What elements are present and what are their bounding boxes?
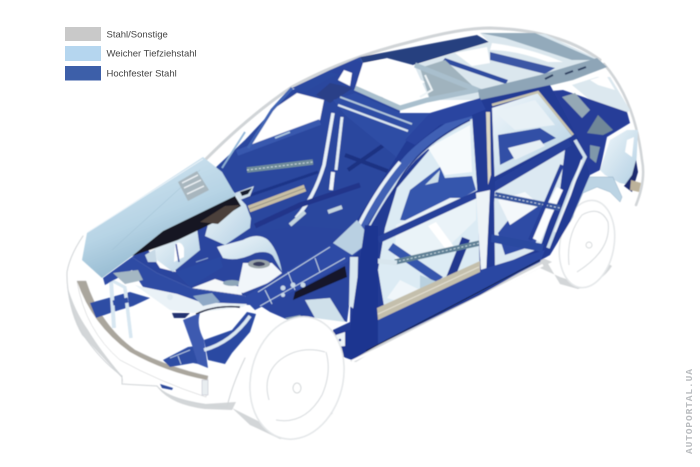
- rear quarter blue frame: [540, 90, 630, 175]
- far A-pillar top: [316, 60, 363, 103]
- windshield opening: [355, 60, 425, 100]
- window frame beige trim: [492, 92, 573, 135]
- rail end at cowl: [235, 186, 254, 200]
- sunroof frame: [355, 65, 477, 108]
- front lower structure: [90, 292, 256, 368]
- near roof rail: [405, 98, 487, 145]
- C-pillar stripes: [548, 140, 585, 248]
- B-pillar: [472, 107, 495, 285]
- car outline: outer roof and rear lines: [67, 28, 643, 407]
- roof panel: [292, 35, 489, 92]
- hood panel: [82, 157, 241, 278]
- near-side blue frame: [333, 85, 590, 360]
- white gap and pale bracket: [145, 228, 242, 295]
- legend label: Stahl/Sonstige: Stahl/Sonstige: [106, 30, 168, 40]
- car body-in-white illustration: [67, 28, 643, 449]
- legend swatch: Hochfester Stahl: [65, 66, 101, 80]
- near pillar foot: [333, 225, 378, 360]
- hood vent: [178, 171, 209, 201]
- windshield header: [333, 93, 440, 160]
- legend label: Weicher Tiefziehstahl: Weicher Tiefziehstahl: [106, 48, 197, 60]
- far side window: [248, 93, 324, 148]
- shock tower: [205, 192, 282, 293]
- legend: [65, 27, 197, 80]
- rear roof interior: [414, 33, 600, 100]
- legend swatch: Weicher Tiefziehstahl: [65, 46, 101, 61]
- engine bay blue mass: [132, 190, 352, 323]
- front wheel: [237, 307, 357, 449]
- rear wheel arch: [570, 177, 622, 222]
- watermark: AUTOPORTAL.UA: [684, 368, 695, 454]
- far-side cabin panel: [213, 70, 400, 232]
- radiator support: [111, 280, 131, 338]
- rear pale tail panel: [600, 130, 641, 192]
- pale gusset and lower members: [285, 257, 358, 325]
- near A-pillar stripes: [352, 112, 475, 240]
- legend label: Hochfester Stahl: Hochfester Stahl: [106, 68, 177, 80]
- rear door opening: [492, 93, 572, 268]
- rear roof rail gray: [478, 58, 607, 103]
- upper front rail: [103, 257, 250, 318]
- rear wheel: [553, 196, 621, 292]
- front door opening: [378, 118, 480, 312]
- far side details: [222, 88, 390, 226]
- rear interior window: [572, 77, 630, 113]
- near front rail: [243, 220, 372, 310]
- legend swatch: Stahl/Sonstige: [65, 27, 101, 41]
- cross bars: [377, 142, 570, 263]
- bumper beam: [77, 281, 208, 397]
- ground shadows: [67, 258, 612, 439]
- door sill with beige strip: [352, 250, 545, 361]
